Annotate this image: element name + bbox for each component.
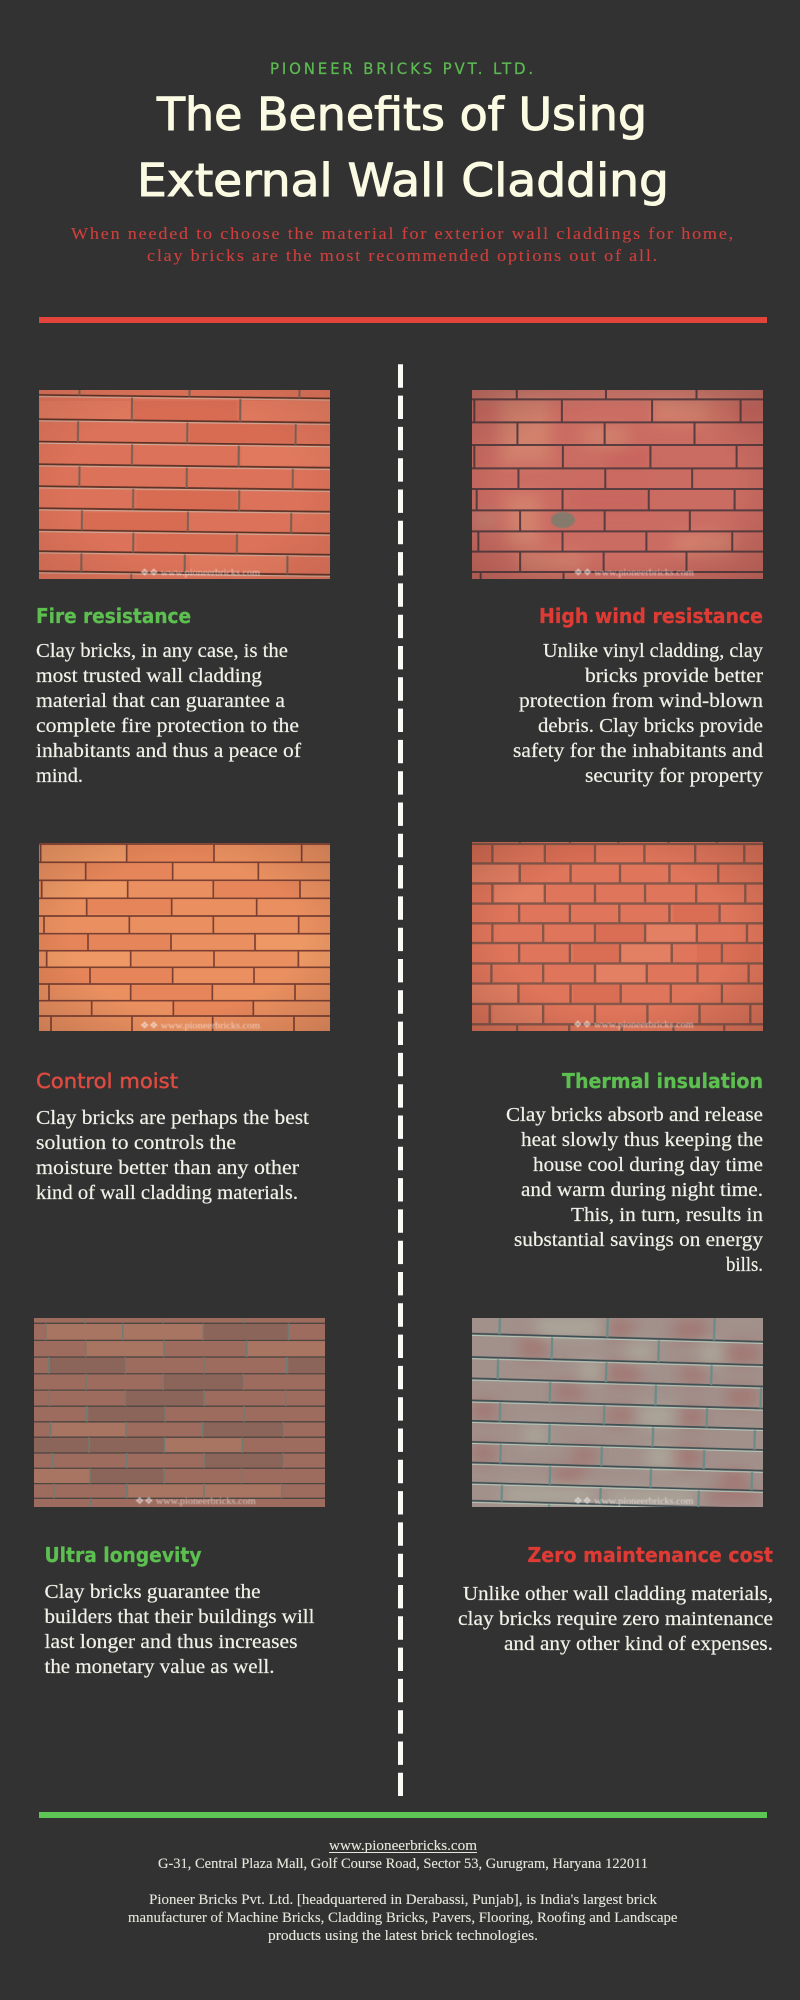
text block: protection from wind-blown bbox=[519, 690, 763, 712]
heading: Control moist bbox=[36, 1069, 178, 1093]
dashed vertical divider bbox=[398, 364, 403, 1796]
text block: clay bricks require zero maintenance bbox=[458, 1608, 773, 1630]
company description bbox=[128, 1892, 678, 1944]
text block: bills. bbox=[726, 1254, 763, 1276]
text block: the monetary value as well. bbox=[44, 1656, 274, 1678]
text block: and any other kind of expenses. bbox=[504, 1633, 773, 1655]
panel: fire resistance bbox=[19, 380, 355, 787]
subtitle: clay bricks are the most recommended options out of all. bbox=[147, 246, 659, 265]
watermark: ❖❖ www.pioneerbricks.com bbox=[140, 568, 261, 578]
text block bbox=[506, 1104, 763, 1276]
heading: Thermal insulation bbox=[562, 1069, 763, 1093]
green divider bar bbox=[39, 1812, 767, 1818]
text block: last longer and thus increases bbox=[44, 1631, 298, 1653]
heading: Ultra longevity bbox=[44, 1543, 202, 1567]
red divider bar bbox=[39, 317, 767, 323]
text block: house cool during day time bbox=[533, 1154, 763, 1176]
text block: most trusted wall cladding bbox=[36, 665, 262, 687]
panel: ultra longevity bbox=[20, 1300, 353, 1678]
subtitle: When needed to choose the material for exterior wall claddings for home, bbox=[71, 224, 735, 243]
grey patch bbox=[551, 512, 575, 528]
title bbox=[137, 88, 669, 207]
heading: Fire resistance bbox=[36, 604, 191, 628]
company description: products using the latest brick technologies. bbox=[268, 1928, 538, 1944]
text block: builders that their buildings will bbox=[44, 1606, 315, 1628]
text block: Unlike other wall cladding materials, bbox=[463, 1583, 773, 1605]
text block: substantial savings on energy bbox=[514, 1229, 763, 1251]
company name: PIONEER BRICKS PVT. LTD. bbox=[270, 59, 536, 78]
photo: orange brick wall bbox=[39, 843, 330, 1031]
text block: heat slowly thus keeping the bbox=[521, 1129, 763, 1151]
watermark: ❖❖ www.pioneerbricks.com bbox=[140, 1021, 261, 1031]
footer bbox=[128, 1838, 678, 1944]
title: External Wall Cladding bbox=[137, 154, 669, 207]
text block: security for property bbox=[585, 765, 763, 787]
photo: weathered red brick wall bbox=[472, 390, 763, 579]
panel: control moist bbox=[20, 830, 353, 1204]
heading: Zero maintenance cost bbox=[528, 1543, 773, 1567]
watermark: ❖❖ www.pioneerbricks.com bbox=[574, 568, 695, 578]
text block: bricks provide better bbox=[585, 665, 763, 687]
text block: Clay bricks, in any case, is the bbox=[36, 640, 288, 662]
photo: grey brick wall bbox=[472, 1318, 763, 1507]
text block: safety for the inhabitants and bbox=[513, 740, 763, 762]
text block: kind of wall cladding materials. bbox=[36, 1182, 298, 1204]
photo: red-orange brick wall bbox=[472, 842, 763, 1031]
text block bbox=[458, 1583, 773, 1655]
text block: moisture better than any other bbox=[36, 1157, 299, 1179]
text block: Clay bricks are perhaps the best bbox=[36, 1107, 309, 1129]
website link: www.pioneerbricks.com bbox=[329, 1838, 477, 1854]
text block bbox=[513, 640, 763, 787]
text block: material that can guarantee a bbox=[36, 690, 285, 712]
text block: solution to controls the bbox=[36, 1132, 236, 1154]
watermark: ❖❖ www.pioneerbricks.com bbox=[573, 1021, 694, 1031]
panel: high wind resistance bbox=[440, 380, 774, 787]
watermark: ❖❖ www.pioneerbricks.com bbox=[135, 1497, 256, 1507]
text block: and warm during night time. bbox=[521, 1179, 763, 1201]
text block bbox=[36, 1107, 309, 1204]
watermark: ❖❖ www.pioneerbricks.com bbox=[573, 1497, 694, 1507]
text block bbox=[44, 1581, 315, 1678]
text block: This, in turn, results in bbox=[571, 1204, 763, 1226]
photo: brown brick wall bbox=[34, 1318, 325, 1507]
text block: inhabitants and thus a peace of bbox=[36, 740, 301, 762]
panel: thermal insulation bbox=[440, 830, 774, 1276]
heading: High wind resistance bbox=[539, 604, 763, 628]
address: G-31, Central Plaza Mall, Golf Course Road, Sector 53, Gurugram, Haryana 122011 bbox=[158, 1856, 648, 1872]
text block: debris. Clay bricks provide bbox=[538, 715, 763, 737]
photo: red brick wall bbox=[39, 390, 330, 579]
title: The Benefits of Using bbox=[156, 88, 647, 141]
text block: Clay bricks guarantee the bbox=[44, 1581, 261, 1603]
text block: mind. bbox=[36, 765, 83, 787]
company description: manufacturer of Machine Bricks, Cladding Bricks, Pavers, Flooring, Roofing and Landscape bbox=[128, 1910, 678, 1926]
text block: complete fire protection to the bbox=[36, 715, 299, 737]
text block: Clay bricks absorb and release bbox=[506, 1104, 763, 1126]
panel: zero maintenance cost bbox=[437, 1300, 776, 1655]
text block bbox=[36, 640, 301, 787]
subtitle bbox=[71, 224, 735, 265]
company description: Pioneer Bricks Pvt. Ltd. [headquartered in Derabassi, Punjab], is India's largest brick bbox=[149, 1892, 657, 1908]
text block: Unlike vinyl cladding, clay bbox=[543, 640, 763, 662]
header bbox=[71, 59, 735, 265]
